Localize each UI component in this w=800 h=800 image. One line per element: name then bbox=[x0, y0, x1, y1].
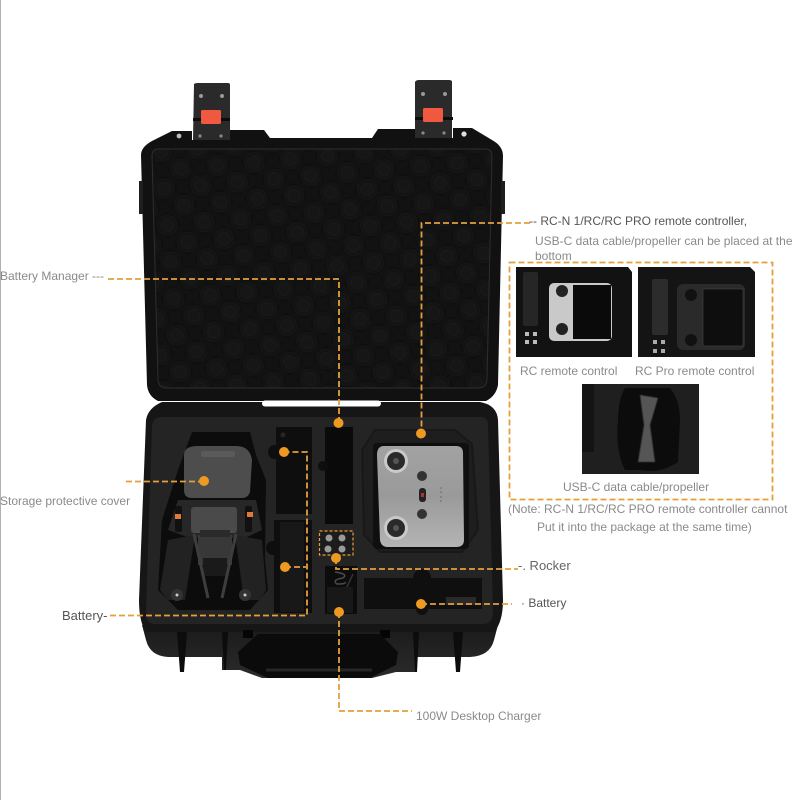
hinge slot bbox=[262, 400, 381, 406]
handle bbox=[238, 634, 398, 678]
drone bbox=[158, 432, 268, 610]
caption: USB-C data cable: USB-C data cable/propeller bbox=[563, 480, 709, 494]
label: battery manager: Battery Manager --- bbox=[0, 269, 104, 283]
panel: placement options bbox=[510, 262, 772, 500]
callout lines bbox=[108, 223, 530, 711]
callout dots bbox=[199, 418, 426, 617]
label: battery right: · Battery bbox=[521, 596, 566, 610]
text: placement description bbox=[535, 234, 793, 263]
photo: USB-C data cable and propeller bbox=[582, 384, 699, 474]
case lid bbox=[139, 80, 505, 401]
remote controller cutout bbox=[362, 430, 478, 552]
label: battery left: Battery- bbox=[62, 608, 108, 623]
foam tray bbox=[146, 417, 493, 624]
rocker sticks bbox=[320, 531, 353, 555]
label: storage protective cover: Storage protective cover bbox=[0, 494, 130, 508]
note: (Note: RC-N 1/RC/RC PRO remote controller cannot bbox=[508, 502, 788, 516]
caption: RC Pro remote control: RC Pro remote control bbox=[635, 364, 754, 378]
case base bbox=[139, 400, 503, 678]
note bbox=[508, 502, 788, 534]
label: rocker: -. Rocker bbox=[518, 558, 571, 573]
text: placement description: bottom bbox=[535, 249, 572, 263]
battery slot upper bbox=[268, 427, 312, 514]
base wall ribs bbox=[177, 630, 463, 672]
left latch bbox=[193, 83, 230, 140]
remote controller bbox=[377, 446, 464, 547]
caption: RC remote control: RC remote control bbox=[520, 364, 617, 378]
charger slot bbox=[325, 566, 357, 614]
base wall bbox=[142, 625, 498, 678]
right latch bbox=[415, 80, 453, 138]
label: remote controller: -- RC-N 1/RC/RC PRO remote controller, bbox=[529, 214, 747, 228]
lid foam bbox=[152, 149, 492, 388]
photo: RC remote control bbox=[516, 267, 632, 357]
battery slot lower bbox=[266, 520, 312, 613]
note: Put it into the package at the same time) bbox=[537, 520, 752, 534]
base shell bbox=[139, 402, 503, 632]
battery slot right bbox=[364, 569, 482, 615]
photo: RC Pro remote control bbox=[638, 267, 755, 357]
battery manager slot bbox=[318, 427, 353, 524]
text: placement description: USB-C data cable/propeller can be placed at the bbox=[535, 234, 793, 248]
label: desktop charger: 100W Desktop Charger bbox=[416, 709, 541, 723]
lid shell bbox=[141, 128, 503, 401]
